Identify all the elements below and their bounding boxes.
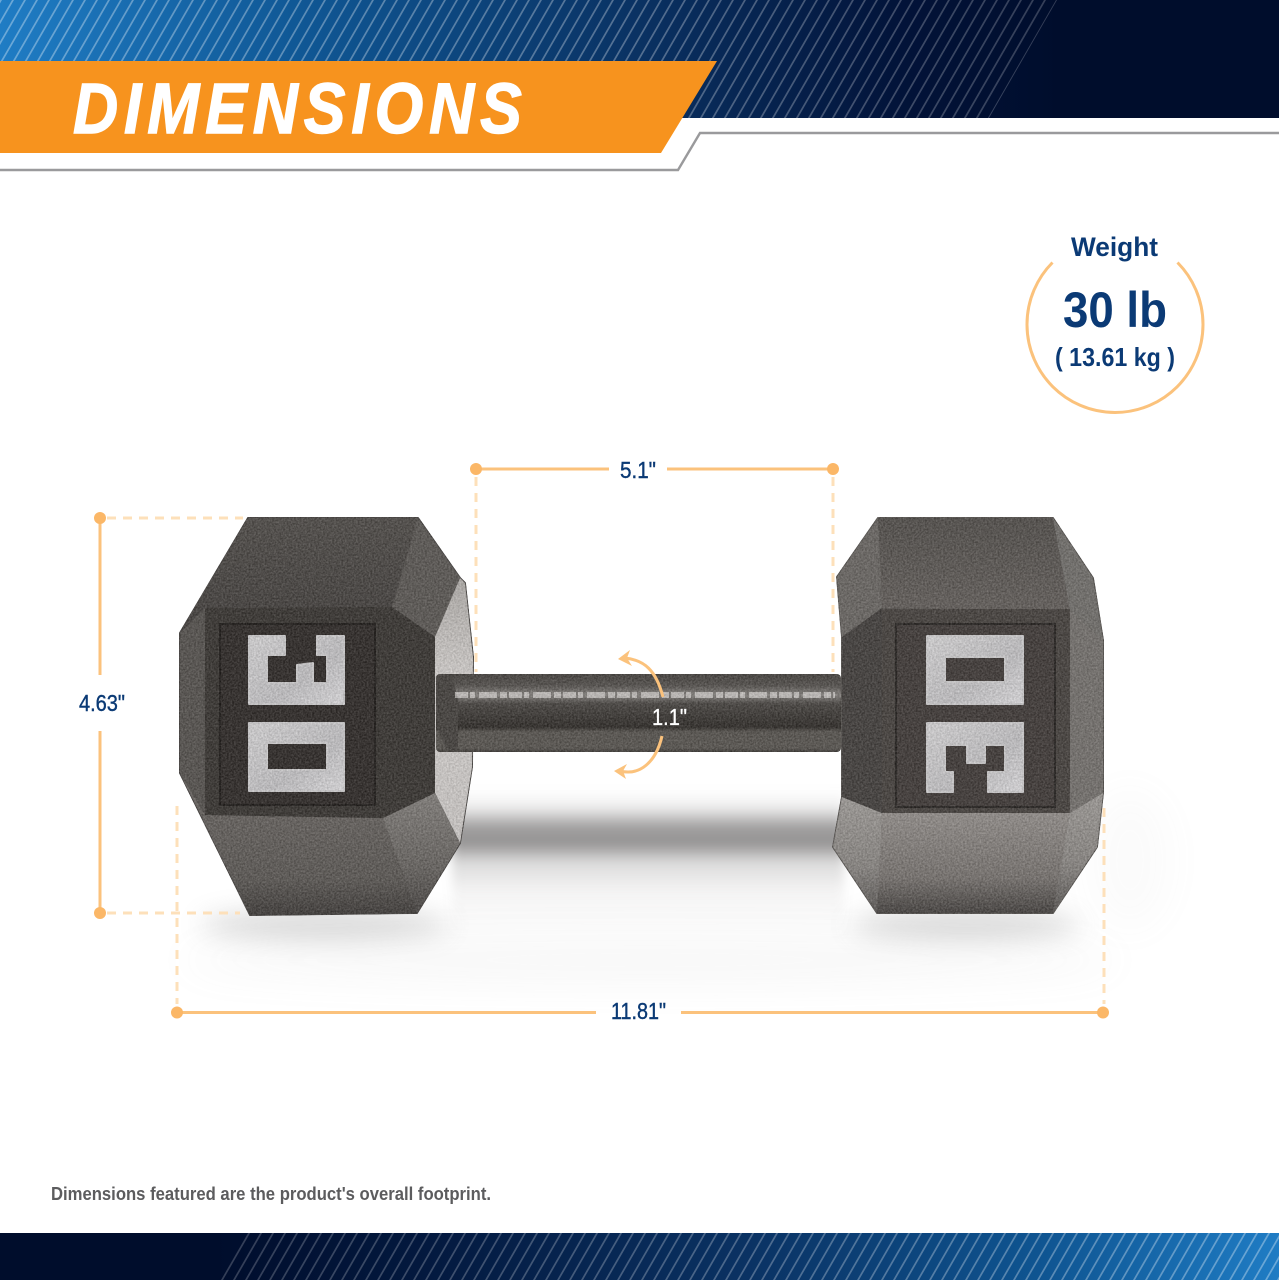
weight badge: ( 13.61 kg ) xyxy=(1055,342,1175,372)
dimension: head height 4.63 inches: 4.63" xyxy=(79,690,125,716)
title banner xyxy=(0,61,717,153)
weight badge xyxy=(1027,232,1203,412)
footer banner xyxy=(0,1233,1279,1280)
dimension: overall length 11.81 inches xyxy=(171,998,1109,1024)
weight badge: 30 lb xyxy=(1063,282,1167,338)
digit 3 right xyxy=(927,723,1023,792)
digit 0 right xyxy=(927,636,1023,704)
dimension: head height 4.63 inches xyxy=(79,512,125,919)
right dumbbell head xyxy=(833,518,1103,913)
dimension: handle diameter 1.1 inches xyxy=(614,650,687,779)
white header notch and grey rule xyxy=(0,118,1279,170)
dashed guide lines xyxy=(107,477,1104,1004)
digit 0 left xyxy=(249,723,344,791)
digit 3 left xyxy=(249,636,344,704)
title: DIMENSIONS xyxy=(73,69,522,149)
left dumbbell head xyxy=(180,518,473,915)
dumbbell handle xyxy=(436,674,841,752)
ground shadow xyxy=(180,790,1170,982)
dumbbell photo illustration xyxy=(180,518,1103,915)
header banner xyxy=(0,0,1279,118)
dimension: overall length 11.81 inches: 11.81" xyxy=(611,998,666,1024)
dimension: handle length 5.1 inches xyxy=(470,457,839,483)
dimension: handle length 5.1 inches: 5.1" xyxy=(620,457,656,483)
dimension: handle diameter 1.1 inches: 1.1" xyxy=(652,704,687,730)
weight badge: Weight xyxy=(1071,232,1158,262)
footnote: Dimensions featured are the product's overall footprint. xyxy=(51,1184,491,1204)
